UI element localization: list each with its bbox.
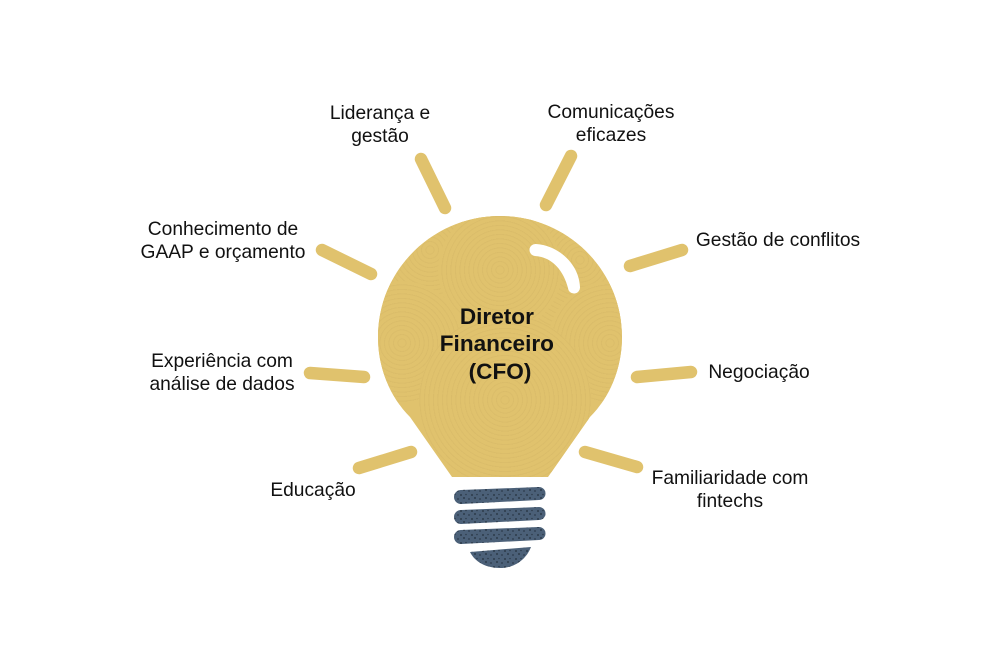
label: Familiaridade com fintechs: Familiaridade com [652, 468, 808, 489]
central title: Financeiro [440, 331, 554, 356]
label: Negociação: Negociação [708, 362, 810, 383]
ray: Gestão de conflitos [630, 250, 682, 266]
bulb screw base [454, 487, 546, 568]
ray: Experiência com análise de dados [310, 373, 364, 377]
label: Experiência com análise de dados: análise de dados [149, 374, 295, 395]
label: Educação: Educação [270, 480, 356, 501]
label: Experiência com análise de dados: Experiência com [151, 351, 293, 372]
label: Conhecimento de GAAP e orçamento: Conhecimento de [148, 219, 298, 240]
central title: Diretor [460, 304, 534, 329]
ray: Educação [359, 452, 411, 468]
ray: Liderança e gestão [421, 159, 445, 208]
ray: Conhecimento de GAAP e orçamento [322, 250, 371, 274]
rays of light [310, 156, 691, 468]
label: Comunicações eficazes: eficazes [576, 125, 646, 146]
bulb glass [378, 216, 622, 477]
central title: (CFO) [469, 359, 531, 384]
ray: Negociação [637, 372, 691, 377]
label: Comunicações eficazes: Comunicações [548, 102, 674, 123]
label: Familiaridade com fintechs: fintechs [697, 491, 763, 512]
ray: Comunicações eficazes [546, 156, 571, 205]
label: Liderança e gestão: Liderança e [330, 103, 430, 124]
label: Gestão de conflitos: Gestão de conflitos [696, 230, 860, 251]
label: Conhecimento de GAAP e orçamento: GAAP e orçamento [141, 242, 305, 263]
bulb highlight [529, 244, 580, 294]
ray: Familiaridade com fintechs [585, 452, 637, 467]
label: Liderança e gestão: gestão [351, 126, 409, 147]
